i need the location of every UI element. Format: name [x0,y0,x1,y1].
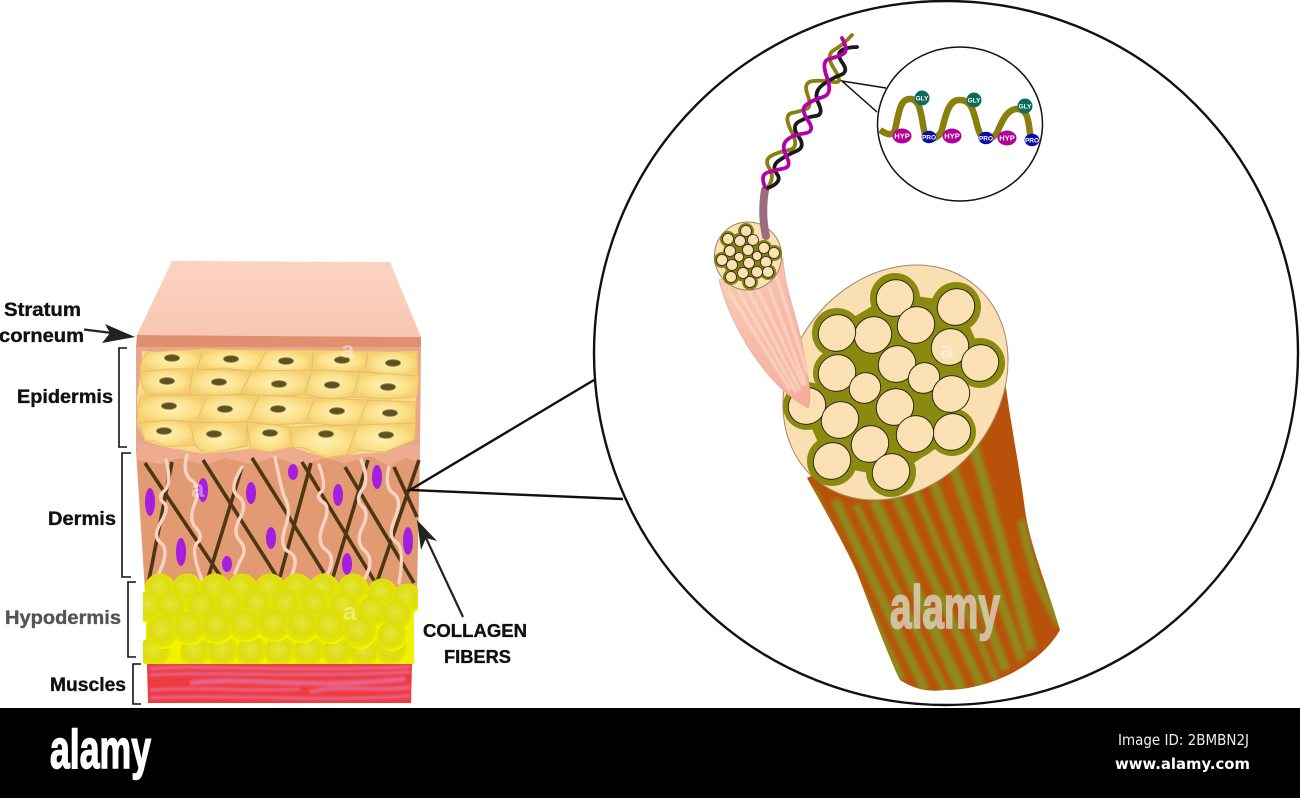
large magnifier circle [594,1,1298,705]
label: dermis: Dermis [48,509,116,530]
bracket: epidermis [119,348,127,447]
magenta strand [763,38,846,187]
fibroblast cells [145,464,413,575]
small fiber bundle [714,222,810,408]
fiber body [807,380,1060,692]
panel: skin cross-section [134,261,422,703]
triple helix [763,35,857,188]
amino acid labels: GLY [916,95,929,102]
small bundle tail [719,258,810,408]
small watermarks [191,337,954,626]
HYP nodes [892,128,1016,146]
fibril cells [781,272,1006,498]
small watermarks: a [341,337,355,364]
image id: Image ID: 2BMBN2J [1118,731,1249,749]
hypodermis fat cells [134,574,422,668]
skin surface top [137,261,421,337]
bracket: hypodermis [128,582,136,657]
olive matrix [783,273,1005,497]
amino acid labels: GLY [968,97,981,104]
label: epidermis: Epidermis [17,387,113,408]
arrow: stratum corneum [84,324,135,343]
footer bar [0,708,1300,798]
amino acid labels [894,95,1039,144]
bracket: muscles [133,664,141,704]
amino acid chain [880,99,1031,139]
amino acid labels: PRO [1025,137,1039,144]
epidermis cells [137,349,419,458]
website: www.alamy.com [1115,755,1250,773]
olive strand [767,35,852,187]
muscle layer [147,664,412,703]
zoom lines to amino acid inset [842,81,886,112]
amino acid inset circle [878,47,1042,201]
small watermarks: a [940,337,954,364]
label: fibers: FIBERS [444,646,511,667]
label: corneum: corneum [0,326,84,347]
stratum corneum band [136,335,421,348]
label: stratum: Stratum [4,300,81,321]
label: collagen: COLLAGEN [423,620,527,641]
small bundle fibrils [716,226,780,288]
amino acid labels: PRO [979,135,993,142]
magnification lines [410,380,623,499]
dermis layer [136,450,420,592]
amino acid labels: HYP [944,132,960,141]
amino acid labels: GLY [1019,103,1032,110]
label: hypodermis: Hypodermis [5,608,121,629]
black strand [768,47,857,188]
PRO nodes [922,131,1040,146]
GLY nodes [914,90,1032,114]
collagen fibers in dermis [145,458,419,590]
arrow: collagen fibers [417,520,463,617]
label: muscles: Muscles [50,675,126,696]
cell nuclei [156,355,400,438]
small watermarks: a [191,476,205,503]
amino acid labels: PRO [922,134,936,141]
large collagen fiber bundle [782,264,1060,691]
amino acid labels: HYP [999,134,1015,143]
small watermarks: a [343,599,357,626]
epidermis cell backing [137,351,418,458]
bracket: dermis [122,453,131,577]
stem joining helix to bundle [763,190,766,236]
elastic wavy fibers [156,455,401,583]
dermal ridge [136,445,420,466]
small bundle cross-section [714,222,782,290]
epidermis background [136,347,421,452]
small bundle matrix [714,223,782,290]
fiber cross-section [736,220,1055,545]
amino acid labels: HYP [894,132,910,141]
watermark: alamy on bundle: alamy [890,574,1000,641]
footer logo: alamy [50,718,151,780]
